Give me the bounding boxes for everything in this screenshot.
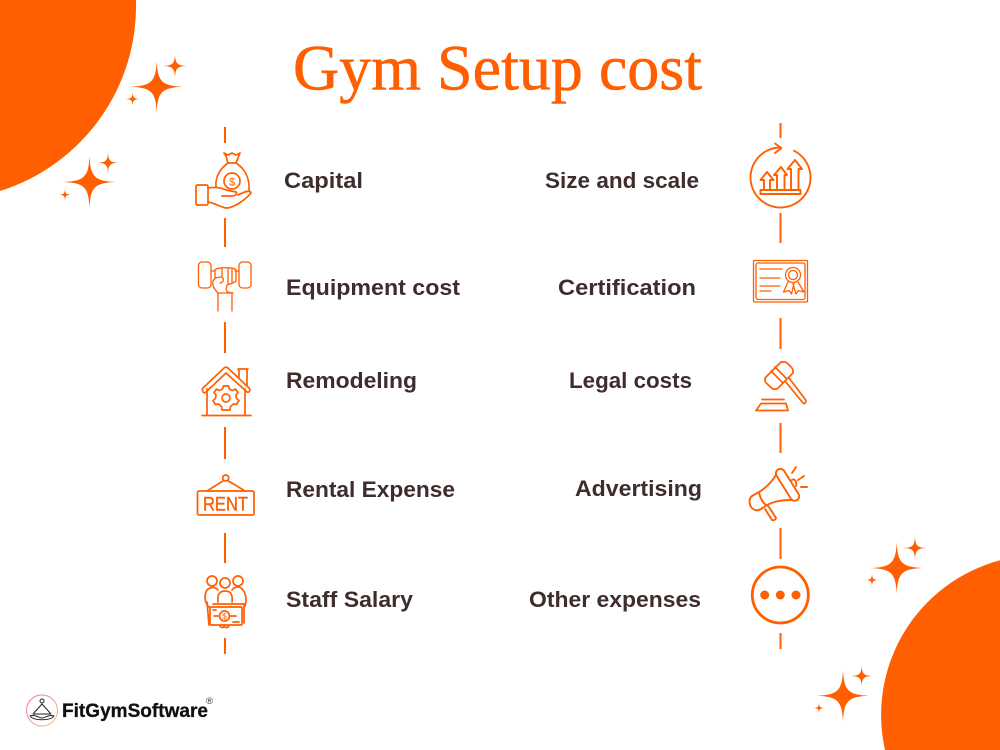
icon: dumbbell in fist [198,262,251,311]
icon: rent sign [198,475,254,516]
logo emblem [26,695,58,726]
label: Rental Expense: Rental Expense [286,477,455,502]
label: Equipment cost: Equipment cost [286,275,461,300]
label: Capital: Capital [284,168,363,193]
icon: growth arrows in circle [751,144,811,208]
corner circle: bottom right [881,560,1000,750]
timeline: right dashed line [780,123,782,649]
label: Staff Salary: Staff Salary [286,587,414,612]
label: Certification: Certification [558,275,696,300]
label: Remodeling: Remodeling [286,368,417,393]
icon: megaphone [750,467,807,520]
logo: FitGymSoftware [26,695,213,726]
title: Gym Setup cost [293,32,702,104]
timeline: left dashed line [224,127,226,654]
label: Size and scale: Size and scale [545,168,699,193]
corner circle: top left [0,0,136,191]
icon: rent sign: RENT [203,494,248,516]
icon: certificate [754,260,808,302]
logo wordmark: FitGymSoftware [62,701,208,722]
label: Other expenses: Other expenses [529,587,701,612]
label: Legal costs: Legal costs [569,368,692,393]
logo registered mark: ® [206,696,213,707]
icon: house with gear [202,367,251,416]
icon: gavel [756,362,806,410]
icon: staff with money: $ [222,612,227,621]
sparkles: top left pair [59,54,187,208]
icon: more dots in circle [752,567,808,623]
sparkles: bottom right pair [814,536,926,722]
label: Advertising: Advertising [575,476,702,501]
icon: staff with money [205,576,246,628]
icon: money bag in hand [196,153,251,208]
icon: money bag in hand: $ [229,176,235,188]
